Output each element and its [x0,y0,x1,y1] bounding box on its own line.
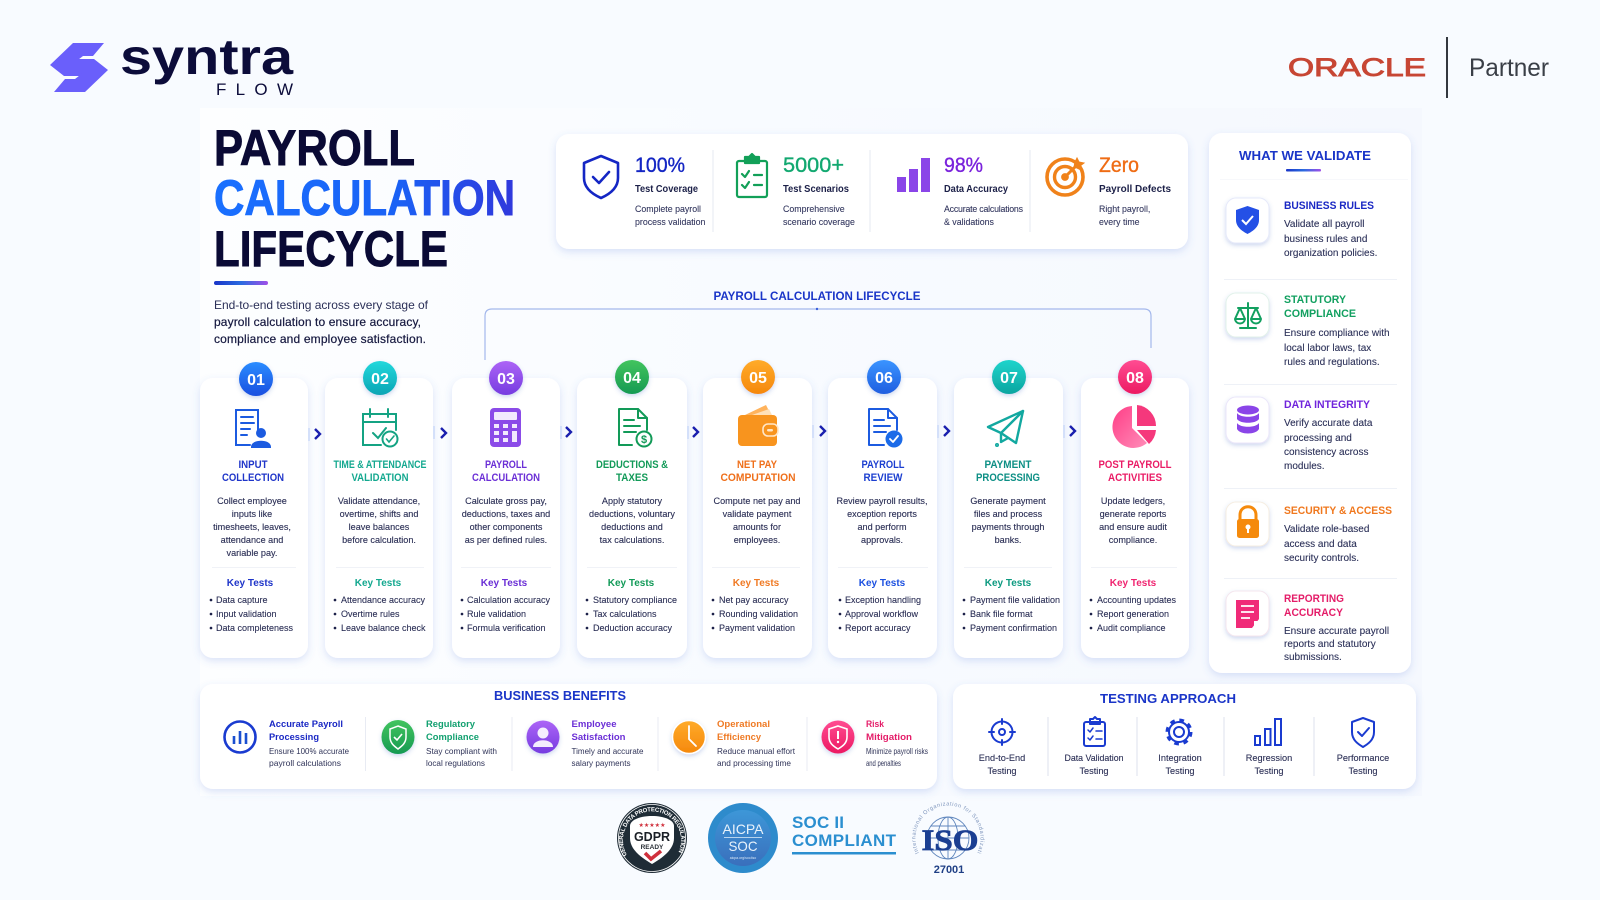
title: CALCULATION [214,170,515,226]
item: statutory compliance: Ensure compliance with [1284,328,1390,339]
card 4: deductions and taxes: Deduction accuracy [593,623,673,633]
stat: test scenarios [737,154,855,227]
item: statutory compliance: local labor laws, tax [1284,343,1371,354]
card 7: payment processing: Bank file format [970,609,1033,619]
card 1: input collection: Key Tests [227,578,274,589]
panel: what we validate: WHAT WE VALIDATE [1239,148,1371,163]
badge: SOC II compliant: SOC II [792,813,844,832]
panel: key stats [556,134,1188,249]
item: business rules: Validate all payroll [1284,219,1364,230]
card 6: payroll review: and perform [857,522,907,532]
benefit: risk mitigation: Risk [866,719,885,730]
icon: report [1226,591,1269,636]
item: business rules: business rules and [1284,234,1367,245]
item: statutory compliance [1226,293,1390,368]
icon: shield [584,156,618,198]
card 8: post payroll activities: Update ledgers, [1101,496,1165,506]
benefit: operational efficiency: and processing time [717,758,791,768]
benefit: accurate payroll processing: Accurate Payroll [269,719,343,730]
card 6: payroll review: approvals. [861,535,903,545]
logo wordmark: syntra [120,29,294,85]
approach: performance: Testing [1348,766,1378,776]
card 1: input collection: COLLECTION [222,472,284,484]
stat: test coverage: 100% [635,154,685,177]
item: data integrity [1226,397,1373,472]
card 1: input collection: INPUT [238,459,268,471]
stat: test scenarios: scenario coverage [783,217,855,227]
badge 02 [363,361,397,395]
card 1: input collection: Data completeness [216,623,294,633]
badge 07 [992,360,1026,394]
panel: testing approach [953,684,1416,789]
card 5: net pay computation: amounts for [733,522,781,532]
card 3: payroll calculation: other components [470,522,543,532]
arrow [687,426,698,439]
benefit: accurate payroll processing: payroll calculations [269,758,341,768]
badge: GDPR ready: READY [641,844,664,851]
card 2: time and attendance: Attendance accuracy [341,595,426,605]
card 4: deductions and taxes: Tax calculations [593,609,657,619]
icon: crosshair [989,719,1015,745]
card 2: time and attendance [325,361,433,658]
card 5: net pay computation: Net pay accuracy [719,595,789,605]
icon: paper plane [988,411,1023,446]
card 6: payroll review: Report accuracy [845,623,911,633]
arrow [812,425,825,438]
card 5: net pay computation: Rounding validation [719,609,798,619]
benefit: regulatory compliance: Compliance [426,732,479,743]
icon: document with check [869,409,902,448]
card 8: post payroll activities: and ensure audit [1099,522,1167,532]
badge: ISO 27001 [912,802,985,876]
stat: data accuracy [897,154,1024,227]
Oracle Partner logo [1288,37,1549,98]
stat: data accuracy: Accurate calculations [944,204,1024,214]
item: reporting accuracy: ACCURACY [1284,607,1344,619]
icon: clipboard [1084,717,1105,746]
card 8: post payroll activities [1081,360,1189,658]
item: business rules [1226,198,1377,259]
card 7: payment processing: Generate payment [970,496,1046,506]
stat: test coverage: Complete payroll [635,204,701,214]
card 1: input collection: Input validation [216,609,277,619]
card 7: payment processing: PROCESSING [976,472,1040,484]
card 1: input collection: attendance and [221,535,283,545]
card 1: input collection: variable pay. [227,548,277,558]
title underline [214,281,268,285]
arrow [308,428,320,441]
panel: business benefits [200,684,937,789]
badge 03: 03 [497,371,515,388]
item: security and access: SECURITY & ACCESS [1284,505,1392,517]
card 8: post payroll activities: compliance. [1109,535,1157,545]
intro text: payroll calculation to ensure accuracy, [214,315,421,329]
main content background [200,108,1422,796]
stat: test coverage: Test Coverage [635,183,698,195]
logo mark [50,43,108,92]
badge 08 [1118,360,1152,394]
card 3: payroll calculation: PAYROLL [485,459,527,471]
card 5: net pay computation: NET PAY [737,459,777,471]
benefit: regulatory compliance: Regulatory [426,719,476,730]
icon: target [1047,158,1084,195]
badge 06: 06 [875,370,893,387]
approach: regression [1246,719,1292,776]
badge: SOC II compliant [792,813,897,854]
icon: bars in ring [224,722,256,752]
badge: GDPR ready [617,803,687,873]
badge: AICPA SOC: AICPA [722,821,764,837]
card 6: payroll review: Approval workflow [845,609,919,619]
benefit: regulatory compliance [382,719,497,768]
card 5: net pay computation: Payment validation [719,623,795,633]
card 1: input collection: Data capture [216,595,268,605]
stat: test scenarios: Comprehensive [783,204,845,214]
badge: AICPA SOC: aicpa.org/soc4so [730,856,756,860]
panel: what we validate [1209,133,1411,673]
benefit: employee satisfaction: Timely and accurate [572,746,644,756]
benefit: operational efficiency: Operational [717,719,770,730]
benefit: accurate payroll processing [224,719,349,768]
stat: zero defects: Right payroll, [1099,204,1150,214]
card 5: net pay computation: validate payment [723,509,792,519]
badge: AICPA SOC [708,803,778,873]
card 5: net pay computation: Key Tests [733,578,780,589]
stat: zero defects: every time [1099,217,1140,227]
card 7: payment processing: Payment confirmation [970,623,1057,633]
arrow [560,426,571,439]
stat: data accuracy: & validations [944,217,994,227]
card 1: input collection: Collect employee [217,496,287,506]
card 8: post payroll activities: Report generation [1097,609,1169,619]
item: data integrity: processing and [1284,433,1352,444]
benefit: regulatory compliance: Stay compliant with [426,746,497,756]
card 1: input collection: inputs like [232,509,272,519]
icon: alert shield [822,720,854,754]
icon: document with person [236,410,270,447]
benefit: accurate payroll processing: Ensure 100% accurate [269,746,349,756]
benefit: operational efficiency [672,719,796,768]
card 4: deductions and taxes: deductions and [601,522,663,532]
stat: data accuracy: 98% [944,154,983,177]
badge 05 [741,360,775,394]
card 8: post payroll activities: POST PAYROLL [1098,459,1172,471]
item: data integrity: modules. [1284,461,1325,472]
card 8: post payroll activities: Audit compliance [1097,623,1166,633]
badge 06 [867,360,901,394]
icon: clock [672,720,706,754]
icon: scales [1226,293,1269,337]
benefit: employee satisfaction: salary payments [572,758,630,768]
item: data integrity: Verify accurate data [1284,418,1373,429]
benefit: operational efficiency: Efficiency [717,732,762,743]
item: data integrity: consistency across [1284,447,1368,458]
intro text: compliance and employee satisfaction. [214,332,426,346]
card 4: deductions and taxes [577,360,687,658]
icon: gear [1168,720,1190,744]
card 5: net pay computation: COMPUTATION [720,472,796,484]
card 2: time and attendance: Leave balance check [341,623,426,633]
approach: end-to-end [979,719,1025,776]
icon: calculator [490,408,521,447]
item: reporting accuracy: submissions. [1284,652,1342,663]
approach: integration [1158,720,1202,776]
benefit: employee satisfaction [526,719,644,768]
card 7: payment processing [954,360,1063,658]
card 1: input collection [200,362,308,658]
card 8: post payroll activities: generate reports [1100,509,1167,519]
approach: data validation: Testing [1079,766,1109,776]
title: LIFECYCLE [214,221,448,277]
card 3: payroll calculation: Key Tests [481,578,528,589]
card 7: payment processing: banks. [995,535,1021,545]
badge: AICPA SOC: SOC [728,838,758,854]
card 3: payroll calculation: Rule validation [467,609,526,619]
stat: zero defects [1047,154,1171,227]
card 1: input collection: timesheets, leaves, [213,522,291,532]
stat: zero defects: Zero [1099,154,1139,177]
icon: green shield [382,720,414,754]
badge 05: 05 [749,370,767,387]
card 6: payroll review [828,360,937,658]
approach: data validation: Data Validation [1064,753,1124,763]
badge 07: 07 [1000,370,1018,387]
stat: test coverage: process validation [635,217,706,227]
card 7: payment processing: Key Tests [985,578,1032,589]
icon: document with dollar [619,409,652,446]
icon: wallet [738,405,778,446]
item: security and access: security controls. [1284,553,1359,564]
badge: GDPR ready: GDPR [634,830,670,844]
card 3: payroll calculation: Formula verification [467,623,546,633]
card 4: deductions and taxes: Key Tests [608,578,655,589]
card 7: payment processing: Payment file validation [970,595,1060,605]
Partner label: Partner [1469,54,1549,82]
item: security and access: Validate role-based [1284,524,1369,535]
intro text [214,298,429,346]
badge: GDPR ready: ★★★★★ [639,822,665,829]
card 7: payment processing: files and process [974,509,1043,519]
badge 04 [615,360,649,394]
icon: clipboard [737,154,767,197]
card 4: deductions and taxes: deductions, voluntary [589,509,675,519]
card 5: net pay computation: employees. [734,535,780,545]
approach: end-to-end: Testing [987,766,1017,776]
logo: Syntra Flow [50,29,294,99]
benefit: risk mitigation [822,719,928,768]
arrow [433,426,446,439]
benefit: risk mitigation: Minimize payroll risks [866,746,928,756]
card 3: payroll calculation: deductions, taxes and [462,509,550,519]
card 6: payroll review: REVIEW [864,472,902,484]
arrow [1063,425,1075,438]
stat: test coverage [584,154,706,227]
stat: zero defects: Payroll Defects [1099,183,1171,195]
card 3: payroll calculation: CALCULATION [472,472,540,484]
logo subtext: FLOW [216,80,293,99]
item: statutory compliance: STATUTORY [1284,294,1347,306]
card 4: deductions and taxes: tax calculations. [600,535,664,545]
item: business rules: BUSINESS RULES [1284,200,1374,212]
lifecycle bracket [485,308,1151,360]
badge 04: 04 [623,370,641,387]
badge 01: 01 [247,372,265,389]
icon: shield [1226,198,1269,243]
approach: performance [1337,718,1389,776]
badge: ISO 27001: 27001 [934,864,964,876]
card 4: deductions and taxes: TAXES [616,472,648,484]
approach: data validation [1064,717,1124,776]
icon: database [1226,397,1269,443]
icon: bars [897,158,930,192]
card 2: time and attendance: before calculation. [342,535,416,545]
benefit: risk mitigation: Mitigation [866,732,912,743]
approach: regression: Testing [1254,766,1284,776]
stat: test scenarios: Test Scenarios [783,183,849,195]
benefit: operational efficiency: Reduce manual effort [717,746,796,756]
approach: integration: Testing [1165,766,1195,776]
item: statutory compliance: rules and regulations. [1284,357,1380,368]
card 2: time and attendance: leave balances [349,522,410,532]
card 2: time and attendance: Key Tests [355,578,402,589]
item: data integrity: DATA INTEGRITY [1284,399,1371,411]
stat: data accuracy: Data Accuracy [944,183,1008,195]
panel: testing approach: TESTING APPROACH [1100,691,1236,706]
card 2: time and attendance: overtime, shifts and [340,509,418,519]
approach: performance: Performance [1337,753,1389,763]
approach: regression: Regression [1246,753,1292,763]
card 5: net pay computation: Compute net pay and [714,496,800,506]
card 7: payment processing: payments through [972,522,1044,532]
card 2: time and attendance: TIME & ATTENDANCE [334,459,426,471]
card 2: time and attendance: Validate attendance, [338,496,420,506]
card 3: payroll calculation: Calculate gross pay, [465,496,547,506]
item: reporting accuracy: reports and statutory [1284,639,1376,650]
badge 08: 08 [1126,370,1144,387]
item: security and access [1226,502,1392,564]
card 7: payment processing: PAYMENT [984,459,1032,471]
icon: calendar with check [363,409,398,446]
icon: padlock [1226,502,1269,546]
benefit: employee satisfaction: Employee [572,719,616,730]
card 5: net pay computation [703,360,812,658]
icon: pie chart [1112,405,1156,448]
item: statutory compliance: COMPLIANCE [1284,308,1356,320]
card 6: payroll review: Key Tests [859,578,906,589]
card 8: post payroll activities: Key Tests [1110,578,1157,589]
Oracle wordmark: ORACLE [1288,54,1426,82]
badge: SOC II compliant: COMPLIANT [792,831,897,850]
card 8: post payroll activities: ACTIVITIES [1108,472,1162,484]
card 3: payroll calculation [452,361,560,658]
card 6: payroll review: PAYROLL [862,459,905,471]
item: reporting accuracy [1226,591,1389,663]
benefit: risk mitigation: and penalties [866,758,901,768]
item: reporting accuracy: Ensure accurate payroll [1284,626,1389,637]
approach: integration: Integration [1158,753,1202,763]
item: reporting accuracy: REPORTING [1284,593,1344,605]
badge: ISO 27001: International Organization for Standardization [912,802,985,854]
stat: test scenarios: 5000+ [783,154,844,177]
badge 02: 02 [371,371,389,388]
arrow [937,425,949,438]
card 8: post payroll activities: Accounting updates [1097,595,1177,605]
card 3: payroll calculation: Calculation accuracy [467,595,551,605]
benefit: employee satisfaction: Satisfaction [572,732,626,743]
card 4: deductions and taxes: DEDUCTIONS & [596,459,668,471]
card 4: deductions and taxes: Statutory compliance [593,595,677,605]
badge 03 [489,361,523,395]
intro text: End-to-end testing across every stage of [214,298,429,312]
card 6: payroll review: Exception handling [845,595,921,605]
badge: GDPR ready: GENERAL DATA PROTECTION REGULATION [618,807,685,856]
item: business rules: organization policies. [1284,248,1377,259]
card 2: time and attendance: VALIDATION [352,472,408,484]
benefit: regulatory compliance: local regulations [426,758,485,768]
icon: shield [1352,718,1374,747]
benefit: accurate payroll processing: Processing [269,732,319,743]
title: PAYROLL [214,120,415,176]
card 6: payroll review: Review payroll results, [837,496,927,506]
card 3: payroll calculation: as per defined rules. [465,535,547,545]
badge 01 [239,362,273,396]
badge: ISO 27001: ISO [922,824,978,857]
icon: person [526,720,560,754]
title [214,120,515,277]
approach: end-to-end: End-to-End [979,753,1025,763]
item: security and access: access and data [1284,539,1357,550]
lifecycle heading: PAYROLL CALCULATION LIFECYCLE [714,289,920,303]
icon: outline bars [1255,719,1281,745]
card 2: time and attendance: Overtime rules [341,609,400,619]
icon: document with dollar: $ [641,434,647,446]
card 6: payroll review: exception reports [847,509,917,519]
card 4: deductions and taxes: Apply statutory [602,496,663,506]
panel: business benefits: BUSINESS BENEFITS [494,688,626,703]
